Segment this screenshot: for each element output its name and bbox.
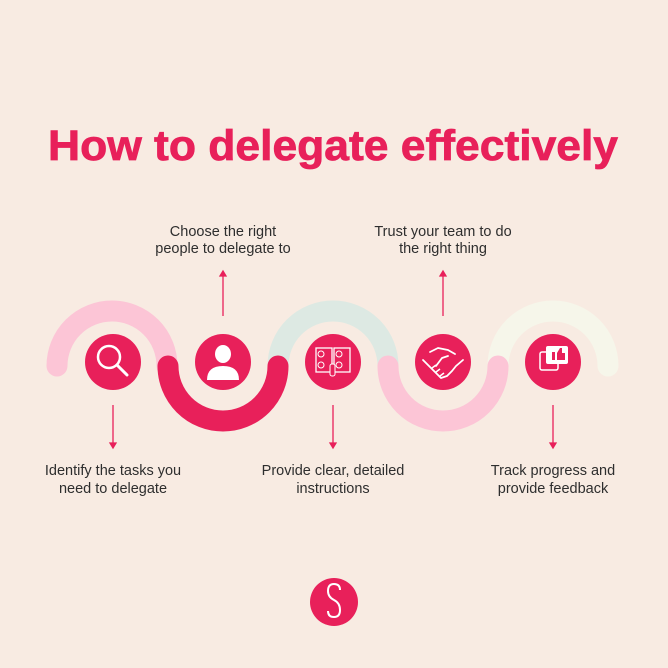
icon: magnifier — [85, 334, 141, 390]
labels: Trust your team to do — [374, 224, 512, 240]
arc 1 — [57, 311, 167, 366]
icon: instructions book — [305, 334, 361, 390]
icon: person — [195, 334, 251, 390]
labels: need to delegate — [59, 481, 167, 497]
arc 4 — [388, 366, 498, 421]
labels: people to delegate to — [155, 241, 291, 257]
labels: Identify the tasks you — [45, 463, 181, 479]
title: How to delegate effectively — [48, 122, 618, 170]
labels: Track progress and — [491, 463, 615, 479]
icon: feedback — [525, 334, 581, 390]
arc 5 — [498, 311, 608, 366]
labels — [45, 224, 615, 497]
wave path — [57, 311, 608, 421]
labels: the right thing — [399, 241, 487, 257]
logo — [310, 578, 358, 626]
arrows — [110, 271, 556, 448]
arc 3 — [278, 311, 388, 366]
arc 2 — [168, 366, 278, 421]
icon: handshake — [415, 334, 471, 390]
labels: Choose the right — [170, 224, 276, 240]
labels: Provide clear, detailed — [262, 463, 404, 479]
labels: instructions — [296, 481, 370, 497]
labels: provide feedback — [498, 481, 609, 497]
